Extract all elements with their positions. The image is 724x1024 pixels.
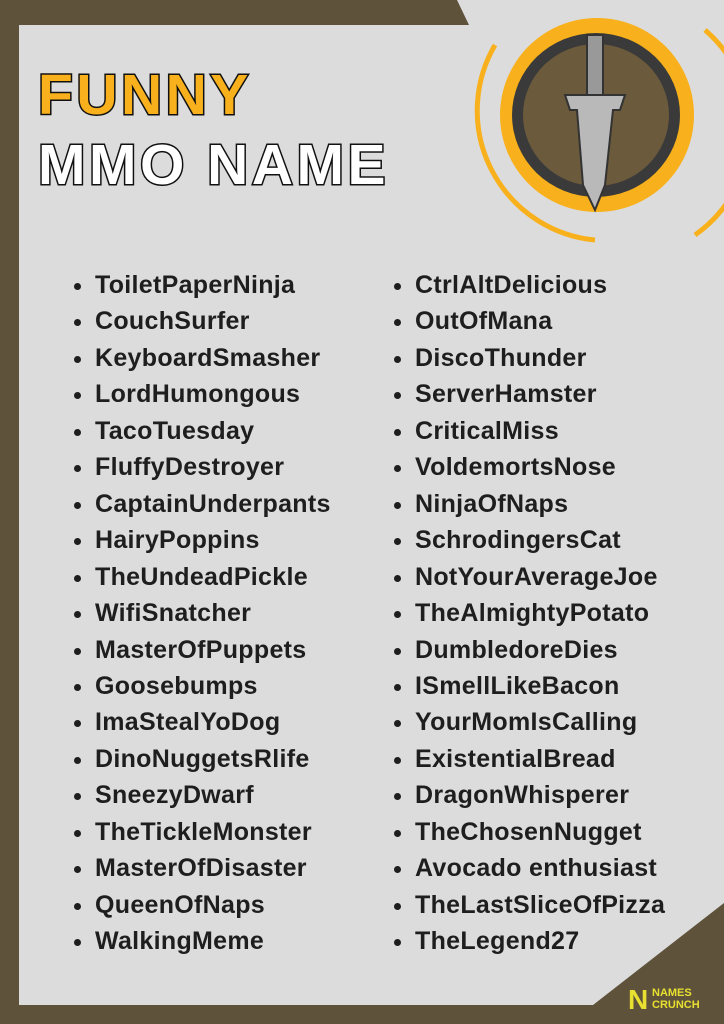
list: right column: DumbledoreDies xyxy=(415,636,618,664)
list: right column: DragonWhisperer xyxy=(415,781,629,809)
list: right column: NinjaOfNaps xyxy=(415,490,568,518)
list: right column: ServerHamster xyxy=(415,380,597,408)
list: right column: ISmellLikeBacon xyxy=(415,672,620,700)
list: right column: YourMomIsCalling xyxy=(415,708,637,736)
list: right column: CtrlAltDelicious xyxy=(415,271,607,299)
logo: CRUNCH xyxy=(652,999,700,1011)
list: left column: MasterOfDisaster xyxy=(95,854,307,882)
list: right column: NotYourAverageJoe xyxy=(415,563,658,591)
title xyxy=(38,63,389,197)
list: right column: SchrodingersCat xyxy=(415,526,621,554)
list: left column: LordHumongous xyxy=(95,380,300,408)
list: right column: TheLastSliceOfPizza xyxy=(415,891,665,919)
list: right column: TheChosenNugget xyxy=(415,818,642,846)
list: left column: KeyboardSmasher xyxy=(95,344,320,372)
list: left column: Goosebumps xyxy=(95,672,258,700)
list: left column: TheTickleMonster xyxy=(95,818,312,846)
list: left column: CouchSurfer xyxy=(95,307,250,335)
list: left column: SneezyDwarf xyxy=(95,781,254,809)
list: left column: WalkingMeme xyxy=(95,927,264,955)
list: left column: ToiletPaperNinja xyxy=(95,271,295,299)
logo: NAMES xyxy=(652,987,692,999)
list: right column: DiscoThunder xyxy=(415,344,587,372)
list: left column: TheUndeadPickle xyxy=(95,563,308,591)
icon: shield with sword xyxy=(474,18,724,242)
list: right column: OutOfMana xyxy=(415,307,552,335)
list: right column: VoldemortsNose xyxy=(415,453,616,481)
title: MMO NAME xyxy=(38,133,389,197)
list: right column: Avocado enthusiast xyxy=(415,854,657,882)
list: right column: ExistentialBread xyxy=(415,745,616,773)
list: right column xyxy=(394,271,666,955)
list: left column: ImaStealYoDog xyxy=(95,708,280,736)
list: left column: HairyPoppins xyxy=(95,526,260,554)
list: left column xyxy=(74,271,331,955)
logo xyxy=(628,984,700,1015)
list: left column: WifiSnatcher xyxy=(95,599,251,627)
list: left column: CaptainUnderpants xyxy=(95,490,331,518)
list: left column: QueenOfNaps xyxy=(95,891,265,919)
logo: N xyxy=(628,984,648,1015)
list: left column: TacoTuesday xyxy=(95,417,254,445)
list: right column: TheAlmightyPotato xyxy=(415,599,649,627)
list: right column: CriticalMiss xyxy=(415,417,559,445)
list: left column: MasterOfPuppets xyxy=(95,636,306,664)
list: left column: DinoNuggetsRlife xyxy=(95,745,310,773)
list: left column: FluffyDestroyer xyxy=(95,453,284,481)
title: FUNNY xyxy=(38,63,252,127)
list: right column: TheLegend27 xyxy=(415,927,579,955)
